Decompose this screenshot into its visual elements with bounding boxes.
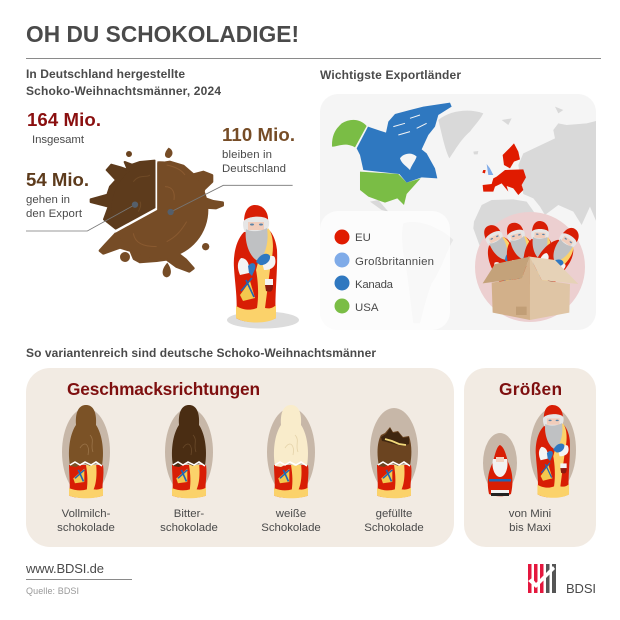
heading: variants: So variantenreich sind deutsche Schoko-Weihnachtsmänner: [26, 346, 376, 360]
callout: 54 Mio: den Export: [26, 208, 83, 220]
label: filled: Schokolade: [364, 522, 424, 534]
callout: domestic line: [171, 185, 293, 212]
panel: legend: Großbritannien: [355, 256, 434, 268]
logo: BDSI: [528, 564, 596, 596]
heading: flavours: Geschmacksrichtungen: [67, 379, 260, 399]
icon: box of santas: [475, 212, 587, 322]
label: sizes: bis Maxi: [509, 522, 551, 534]
map: USA: [332, 120, 421, 205]
callout: export line: [26, 205, 135, 231]
logo: BDSI: BDSI: [566, 581, 596, 596]
panel: flavours: [26, 368, 454, 547]
total figure: [27, 109, 101, 146]
panel: legend: USA: [355, 302, 379, 314]
map: EU: [503, 143, 520, 168]
icon: dark chocolate santa: [165, 405, 213, 498]
heading: production: In Deutschland hergestellte: [26, 67, 185, 81]
icon: filled chocolate santa: [370, 408, 418, 498]
label: milk: schokolade: [57, 522, 115, 534]
chart: chocolate splat split: [26, 148, 293, 277]
label: milk: Vollmilch-: [62, 508, 111, 520]
map: faint south america: [450, 238, 453, 246]
source: Quelle: BDSI: [26, 586, 79, 596]
label: dark: schokolade: [160, 522, 218, 534]
callout: 54 Mio: 54 Mio.: [26, 169, 89, 190]
panel: legend: EU: [355, 232, 371, 244]
callout: 110 Mio: bleiben in: [222, 149, 272, 161]
panel: export map: [320, 94, 600, 330]
icon: santa with shadow: [227, 205, 299, 328]
panel: legend: Kanada: [355, 279, 394, 291]
label: sizes: von Mini: [509, 508, 551, 520]
callout: 110 Mio: 110 Mio.: [222, 124, 295, 145]
title: OH DU SCHOKOLADIGE!: [26, 21, 299, 47]
map: UK: [487, 164, 493, 175]
label: dark: Bitter-: [174, 508, 204, 520]
panel: sizes: [464, 368, 596, 547]
map: grey countries: [370, 107, 600, 247]
callout: 110 Mio: [222, 124, 295, 175]
panel: legend: [320, 211, 450, 330]
map: Canada: [357, 103, 452, 183]
heading: production: [26, 67, 221, 98]
label: white: Schokolade: [261, 522, 321, 534]
callout: 110 Mio: Deutschland: [222, 163, 286, 175]
heading: export countries: Wichtigste Exportländer: [320, 68, 461, 82]
icon: mini santa: [483, 433, 517, 496]
icon: maxi santa: [530, 405, 576, 498]
heading: sizes: Größen: [499, 379, 562, 399]
total figure: 164 Mio.: [27, 109, 101, 130]
icon: white chocolate santa: [267, 405, 315, 498]
website: www.BDSI.de: [25, 561, 104, 576]
label: white: weiße: [275, 508, 306, 520]
total figure: Insgesamt: [32, 134, 85, 146]
callout: 54 Mio: [26, 169, 89, 220]
heading: production: Schoko-Weihnachtsmänner, 2024: [26, 84, 221, 98]
label: filled: gefüllte: [376, 508, 412, 520]
icon: milk chocolate santa: [62, 405, 110, 498]
callout: 54 Mio: gehen in: [26, 194, 70, 206]
